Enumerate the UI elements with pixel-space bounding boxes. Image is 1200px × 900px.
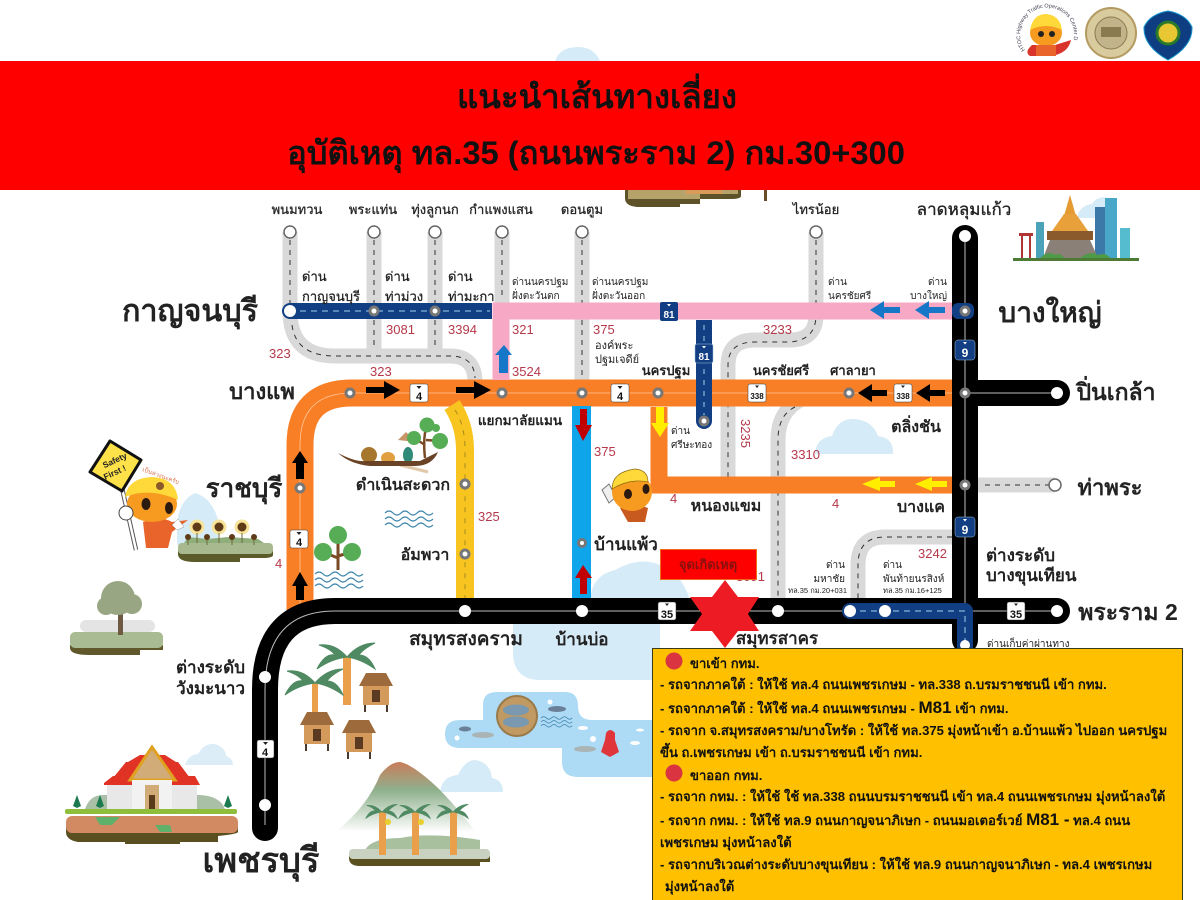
place labels: large cities: ราชบุรี: [206, 473, 282, 505]
cloud: Taling Chan: [815, 419, 893, 454]
shield: 338: [748, 384, 766, 402]
toll labels: ทล.35 กม.16+125: [883, 586, 942, 595]
road numbers: [269, 322, 947, 584]
illustration: floating market boat and tree: [338, 418, 448, 472]
road numbers: 323: [370, 364, 392, 379]
shield: 9 south: [955, 517, 975, 537]
arrow: yellow left 1: [862, 477, 895, 491]
shield: 35 east: [1007, 602, 1025, 621]
grey roads: [290, 232, 1055, 600]
text block: inbound routes: - รถจากภาคใต้ : ให้ใช้ ทล.4 ถนนเพชรเกษม - ทล.338 ถ.บรมราชชนนี เข้า กทม.: [660, 676, 1107, 692]
text block: inbound routes: ขึ้น ถ.เพชรเกษม เข้า ถ.บรมราชชนนี เข้า กทม.: [660, 742, 922, 760]
title banner: [0, 61, 1200, 190]
shield: 9 north: 9: [962, 346, 969, 360]
bang yai node patch: [952, 303, 974, 319]
place labels: large cities: บางใหญ่: [998, 296, 1102, 329]
arrow: red up: [575, 565, 592, 594]
arrow: blue left 1: [870, 301, 900, 319]
bullet: inbound: [666, 652, 682, 670]
road numbers: 375: [593, 322, 615, 337]
place labels: medium: นครชัยศรี: [753, 363, 809, 378]
road numbers: 375: [594, 444, 616, 459]
place labels: large cities: บางขุนเทียน: [986, 565, 1077, 586]
road numbers: 3310: [791, 447, 820, 462]
toll labels: มหาชัย: [814, 574, 845, 585]
road numbers: 323: [269, 346, 291, 361]
road numbers: 325: [478, 509, 500, 524]
text block: outbound routes: - รถจากบริเวณต่างระดับบางขุนเทียน : ให้ใช้ ทล.9 ถนนกาญจนาภิเษก - ทล.4 เพชรเกษม: [660, 856, 1152, 873]
shield: 4 centre: [611, 384, 629, 403]
arrow: black left 2: [916, 384, 945, 402]
road: yellow 325: [452, 405, 465, 598]
place labels: top row: ไทรน้อย: [792, 202, 839, 217]
shield: 35: 35: [661, 609, 673, 621]
place labels: medium: นครปฐม: [642, 363, 690, 380]
toll labels: ทล.35 กม.20+031: [788, 586, 847, 595]
shield: 4 Phetchaburi: [257, 740, 274, 759]
text block: inbound routes: - รถจาก จ.สมุทรสงคราม/บางโทรัด : ให้ใช้ ทล.375 มุ่งหน้าเข้า อ.บ้านแพ้ว ไปออก นครปฐม: [660, 722, 1167, 740]
place labels: medium: ต่างระดับ: [176, 658, 245, 677]
road numbers: 4: [670, 491, 677, 506]
road numbers: 4: [275, 556, 282, 571]
bullet: outbound: [666, 764, 682, 782]
arrow: red down: [575, 409, 592, 441]
illustration: Mountain with palms: [338, 762, 490, 866]
place labels: top row: ลาดหลุมแก้ว: [917, 200, 1011, 220]
place labels: medium: [176, 339, 945, 698]
toll labels: บางใหญ่: [910, 290, 947, 302]
panel: detour instructions: [652, 648, 1182, 900]
shield: 81: 81: [698, 352, 710, 363]
cloud: above banner: [555, 47, 600, 61]
place labels: large cities: ปิ่นเกล้า: [1075, 375, 1156, 405]
incident label: จุดเกิดเหตุ: [679, 557, 737, 573]
illustration: sunflowers: [177, 493, 273, 562]
toll labels: ด่าน: [883, 560, 902, 571]
illustration: ground under banner: [625, 190, 767, 207]
shield: 338 east: 338: [896, 392, 910, 401]
incident marker: red star: [690, 580, 759, 648]
road: dark blue M81: [696, 320, 712, 429]
place labels: medium: สมุทรสาคร: [736, 629, 819, 649]
place labels: large cities: ต่างระดับ: [986, 546, 1055, 565]
illustration: water waves: [385, 511, 433, 527]
text block: outbound routes: เพชรเกษม มุ่งหน้าลงใต้: [660, 834, 792, 851]
toll labels: [302, 269, 1070, 650]
place labels: medium: องค์พระ: [595, 339, 633, 352]
toll labels: ฝั่งตะวันตก: [512, 288, 560, 302]
place labels: medium: อัมพวา: [401, 546, 449, 564]
text block: inbound routes: [660, 676, 1167, 760]
illustration: Bangkok skyline: [1013, 195, 1139, 261]
cloud: by mountain: [440, 760, 503, 792]
illustration: tree on water: [314, 526, 363, 588]
place labels: medium: บ้านบ่อ: [556, 630, 608, 649]
road numbers: 3394: [448, 322, 477, 337]
road: blue 375: [572, 406, 591, 598]
toll labels: ด่าน: [828, 277, 847, 288]
toll labels: ด่าน: [385, 269, 410, 284]
illustration: fishing pond: [445, 692, 652, 777]
road: dark blue Kanchanaburi: [282, 303, 492, 319]
shield: 81 pink: [660, 302, 678, 321]
arrow: black left 1: [858, 384, 887, 402]
grey stations: [296, 307, 969, 558]
text block: outbound routes: [660, 788, 1165, 895]
illustration: tree on ground: [70, 581, 163, 655]
text block: outbound routes: - รถจาก กทม. : ให้ใช้ ใช้ ทล.338 ถนนบรมราชชนนี เข้า ทล.4 ถนนเพชรเกษม มุ่งหน้าลงใต้: [660, 788, 1165, 805]
road numbers: 3081: [386, 322, 415, 337]
road centre lines: [265, 240, 1057, 825]
shield: 4 Ratchaburi: [290, 530, 308, 549]
shield: 81: [695, 344, 713, 363]
illustration: incident mascot: [602, 469, 652, 522]
shield: 4 centre: 4: [617, 391, 624, 403]
toll labels: กาญจนบุรี: [302, 289, 360, 305]
toll labels: ฝั่งตะวันออก: [592, 288, 645, 302]
place labels: medium: วังมะนาว: [176, 679, 245, 698]
shield: 338 east: [894, 384, 912, 402]
place labels: medium: ศาลายา: [830, 363, 876, 378]
arrows: [292, 301, 947, 600]
logo: HTOC mascot: [1016, 4, 1078, 56]
shield: 35: [658, 602, 676, 621]
place labels: top row: [272, 200, 1011, 220]
road: dark blue south link: [850, 611, 965, 652]
shield: 4 Ratchaburi: 4: [296, 537, 303, 549]
shield: 4: [410, 384, 428, 403]
text block: outbound routes: - รถจาก กทม. : ให้ใช้ ทล.9 ถนนกาญจนาภิเษก - ถนนมอเตอร์เวย์ M81 - ทล.4 ถนน: [660, 810, 1130, 829]
heading: inbound: ขาเข้า กทม.: [690, 656, 760, 671]
toll labels: พันท้ายนรสิงห์: [883, 573, 944, 585]
road: orange lower branch: [659, 407, 952, 485]
arrow: black right 1: [366, 381, 400, 399]
toll labels: ด่านนครปฐม: [512, 277, 568, 288]
road numbers: 3242: [918, 546, 947, 561]
toll labels: ท่ามะกา: [448, 289, 495, 304]
road numbers: 3524: [512, 364, 541, 379]
road numbers: 3091: [736, 569, 765, 584]
text block: inbound routes: - รถจากภาคใต้ : ให้ใช้ ทล.4 ถนนเพชรเกษม - M81 เข้า กทม.: [660, 698, 1008, 717]
place labels: top row: ทุ่งลูกนก: [411, 202, 459, 218]
place labels: top row: กำแพงแสน: [469, 202, 533, 217]
white stations: [259, 230, 1063, 811]
illustration: Phetchaburi temple: [65, 744, 238, 844]
toll labels: ศรีษะทอง: [671, 439, 712, 451]
toll labels: ด่าน: [826, 560, 845, 571]
place labels: medium: สมุทรสงคราม: [409, 629, 523, 651]
place labels: top row: พนมทวน: [272, 202, 323, 217]
place labels: large cities: [122, 294, 1178, 882]
road numbers: 4: [832, 496, 839, 511]
toll labels: ด่าน: [448, 269, 473, 284]
logo: blue shield: [1144, 11, 1192, 60]
shield: 35 east: 35: [1010, 609, 1022, 621]
place labels: medium: ตลิ่งชัน: [891, 415, 941, 436]
toll labels: ท่าม่วง: [385, 289, 423, 304]
arrow: yellow left 2: [915, 477, 947, 491]
background cloud: south centre: [513, 561, 690, 680]
place labels: medium: ดำเนินสะดวก: [356, 476, 450, 494]
arrow: black up 2: [292, 572, 308, 600]
shield: 4 Phetchaburi: 4: [262, 747, 269, 759]
incident label: [660, 550, 756, 580]
place labels: medium: แยกมาลัยแมน: [478, 413, 563, 428]
heading: outbound: ขาออก กทม.: [690, 768, 762, 783]
illustration: safety mascot: [90, 441, 188, 550]
highway shields: [257, 302, 1025, 759]
road: pink motorway: [501, 311, 952, 380]
road numbers: 321: [512, 322, 534, 337]
road: black Kanchanaphisek 9: [952, 238, 978, 640]
illustration: safety mascot: Safety: [101, 450, 129, 470]
logo: Department of Highways seal: [1086, 8, 1136, 58]
place labels: top row: พระแท่น: [349, 202, 397, 217]
toll labels: ด่านเก็บค่าผ่านทาง: [987, 636, 1070, 650]
place labels: large cities: กาญจนบุรี: [122, 294, 259, 330]
toll labels: นครชัยศรี: [828, 290, 872, 302]
text block: outbound routes: มุ่งหน้าลงใต้: [665, 878, 734, 895]
place labels: large cities: บางแพ: [229, 379, 295, 404]
place labels: medium: ปฐมเจดีย์: [595, 353, 639, 366]
place labels: large cities: เพชรบุรี: [203, 841, 320, 882]
toll labels: ด่าน: [928, 277, 947, 288]
toll labels: ด่าน: [671, 426, 690, 437]
open terminals: [284, 226, 1061, 491]
place labels: top row: ดอนตูม: [561, 202, 603, 218]
illustration: safety mascot: First !: [102, 463, 128, 482]
arrow: blue up: [495, 345, 512, 373]
shield: 81 pink: 81: [663, 310, 675, 321]
shield: 9 south: 9: [962, 523, 969, 537]
shield: 9 north: [955, 340, 975, 360]
road: black Pinklao: [965, 380, 1057, 406]
title banner: อุบัติเหตุ ทล.35 (ถนนพระราม 2) กม.30+300: [287, 134, 905, 174]
place labels: large cities: พระราม 2: [1078, 599, 1178, 625]
place labels: medium: บ้านแพ้ว: [594, 535, 658, 554]
arrow: yellow down: [651, 407, 669, 437]
title banner: แนะนำเส้นทางเลี่ยง: [457, 73, 737, 115]
grey road centre dashes: [290, 240, 1050, 600]
road numbers: 3233: [763, 322, 792, 337]
arrow: black up 1: [292, 451, 308, 479]
place labels: medium: หนองแขม: [691, 498, 761, 515]
place labels: large cities: ท่าพระ: [1078, 475, 1142, 500]
road numbers: 3235: [738, 419, 753, 448]
illustration: huts and palms: [285, 643, 393, 759]
arrow: black right 2: [456, 381, 491, 399]
shield: 4: 4: [416, 391, 423, 403]
shield: 338: 338: [750, 392, 764, 401]
arrow: blue left 2: [915, 301, 945, 319]
illustration: safety mascot: เป็นห่วงนะครับ: [141, 464, 181, 486]
road: orange highway 4: [300, 393, 952, 620]
toll labels: ด่าน: [302, 269, 327, 284]
road: black Rama 2 and Petchkasem: [265, 611, 1057, 828]
place labels: medium: บางแค: [897, 499, 945, 516]
toll labels: ด่านนครปฐม: [592, 277, 648, 288]
